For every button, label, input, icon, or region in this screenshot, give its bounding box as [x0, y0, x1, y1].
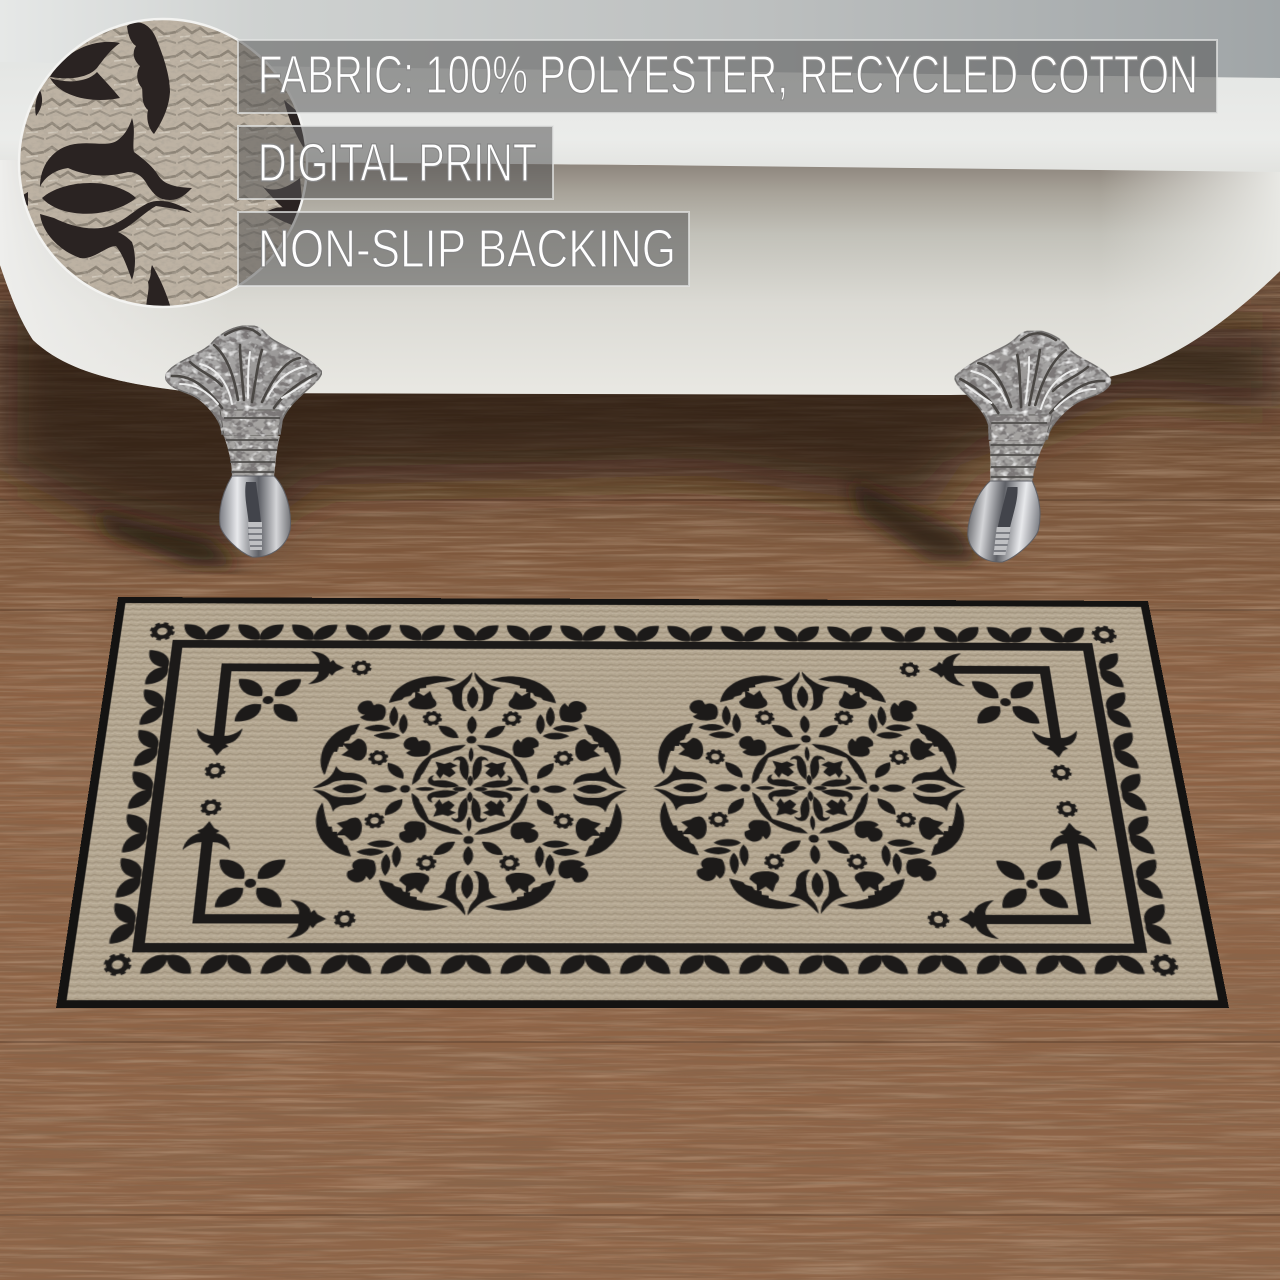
scalloped strip top	[127, 22, 170, 134]
rug speckle texture	[67, 603, 1218, 1000]
label: digital print	[238, 126, 553, 199]
bottom leaf border	[134, 950, 1151, 979]
label: non-slip backing	[238, 212, 689, 286]
left medallion	[302, 672, 630, 916]
panel: rug (flat drawing mapped with perspective)	[56, 597, 1229, 1008]
top leaf border	[177, 620, 1092, 647]
left leaf border	[102, 646, 177, 948]
right medallion	[650, 671, 982, 914]
scallop strip bottom	[146, 265, 170, 306]
right side motifs	[263, 178, 302, 212]
rug base with black binding	[61, 600, 1224, 1004]
floor plank seams	[0, 500, 1280, 1215]
tub shadow on floor	[0, 300, 1280, 568]
frame	[138, 644, 1141, 948]
inner corner brackets	[172, 651, 1112, 939]
tub body highlight left	[0, 160, 230, 393]
label: digital print: DIGITAL PRINT	[258, 133, 537, 193]
right leaf border	[1091, 650, 1178, 949]
callouts: fabric close-up and labels	[18, 18, 1218, 308]
tulip lens	[42, 183, 136, 214]
tulip upper horn	[40, 118, 192, 200]
tub body highlight right	[1100, 170, 1280, 380]
corner flowers	[104, 623, 1178, 975]
tub body	[0, 160, 1280, 395]
tulip lower horn	[40, 201, 192, 280]
leaf pair	[50, 42, 120, 78]
left claw foot	[165, 326, 322, 557]
label: non-slip backing: NON-SLIP BACKING	[258, 219, 676, 279]
circular fabric close-up	[18, 19, 307, 312]
right claw foot	[933, 331, 1117, 562]
tub rim	[0, 62, 1280, 172]
wall	[0, 0, 1280, 90]
